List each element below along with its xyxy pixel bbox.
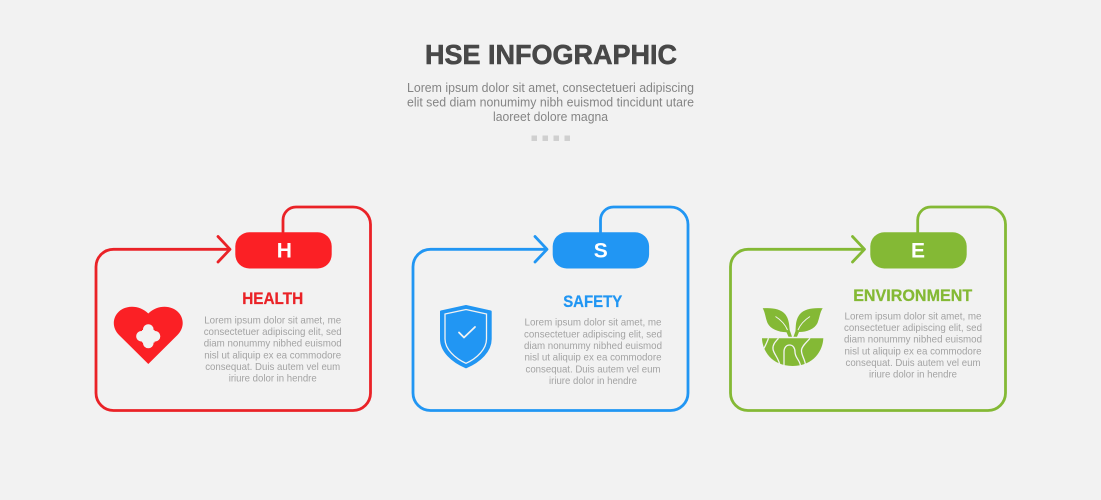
- panel: health: [96, 207, 370, 410]
- health body text: consequat. Duis autem vel eum: [205, 362, 340, 373]
- environment heading: ENVIRONMENT: [853, 287, 972, 305]
- title: HSE INFOGRAPHIC: [425, 39, 677, 70]
- environment badge: [870, 232, 967, 268]
- panel: safety: [413, 207, 688, 410]
- subtitle text: elit sed diam nonumimy nibh euismod tincidunt utare: [407, 96, 694, 110]
- environment body text: [844, 311, 982, 381]
- environment body text: consectetuer adipiscing elit, sed: [844, 323, 982, 334]
- icon: heart with cross: [114, 307, 183, 364]
- health badge: H: [277, 240, 292, 263]
- environment body text: consequat. Duis autem vel eum: [846, 358, 980, 369]
- environment outline arrow: [730, 207, 1006, 410]
- safety badge: [553, 232, 649, 268]
- health body text: diam nonummy nibhed euismod: [204, 339, 342, 350]
- safety body text: [524, 318, 662, 387]
- health body text: Lorem ipsum dolor sit amet, me: [204, 315, 341, 326]
- environment body text: Lorem ipsum dolor sit amet, me: [844, 311, 982, 322]
- subtitle text: [407, 81, 694, 124]
- safety body text: iriure dolor in hendre: [549, 376, 637, 387]
- safety body text: consectetuer adipiscing elit, sed: [524, 329, 662, 340]
- title dots: [532, 136, 570, 141]
- health heading: HEALTH: [242, 290, 303, 308]
- health badge: [235, 232, 332, 268]
- safety heading: SAFETY: [563, 293, 622, 311]
- subtitle text: laoreet dolore magna: [493, 110, 608, 124]
- health outline arrow: [96, 207, 370, 410]
- health body text: nisl ut aliquip ex ea commodore: [204, 350, 341, 361]
- environment body text: diam nonummy nibhed euismod: [844, 335, 982, 346]
- environment badge: E: [911, 240, 925, 263]
- health body text: iriure dolor in hendre: [229, 374, 317, 385]
- safety body text: nisl ut aliquip ex ea commodore: [524, 353, 662, 364]
- health body text: consectetuer adipiscing elit, sed: [204, 327, 342, 338]
- icon: shield with check: [441, 306, 491, 367]
- subtitle text: Lorem ipsum dolor sit amet, consectetueri adipiscing: [407, 81, 694, 95]
- panel: environment: [730, 207, 1006, 410]
- icon: plant in bowl: [762, 308, 823, 366]
- environment body text: iriure dolor in hendre: [869, 370, 957, 381]
- safety body text: consequat. Duis autem vel eum: [526, 364, 660, 375]
- health body text: [204, 315, 342, 385]
- safety outline arrow: [413, 207, 688, 410]
- safety body text: Lorem ipsum dolor sit amet, me: [524, 318, 662, 329]
- safety badge: S: [594, 240, 608, 263]
- environment body text: nisl ut aliquip ex ea commodore: [844, 346, 982, 357]
- safety body text: diam nonummy nibhed euismod: [524, 341, 662, 352]
